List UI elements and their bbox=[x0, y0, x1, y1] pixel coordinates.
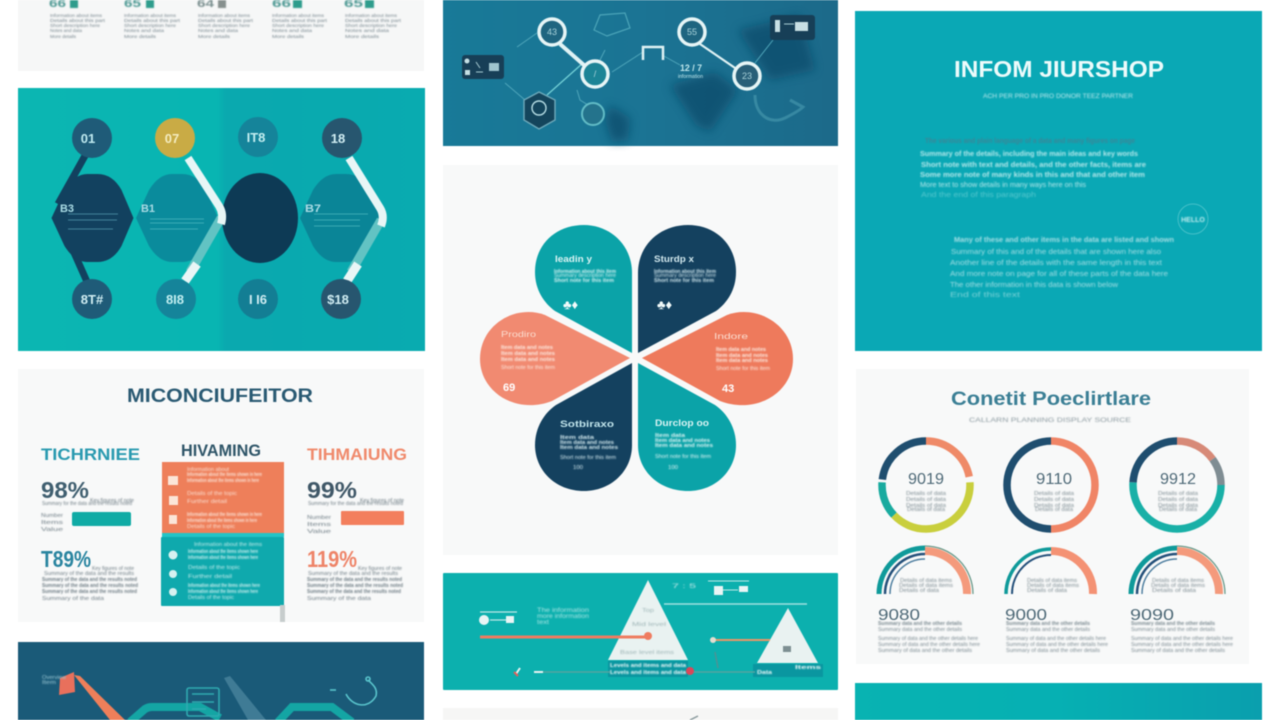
annotation: text bbox=[537, 620, 549, 626]
petal: navy bottom-left: Item data bbox=[560, 435, 594, 441]
column labels and notes: Information about items bbox=[198, 13, 251, 18]
panel: bottom middle card bbox=[443, 708, 838, 720]
speech icon bbox=[594, 13, 630, 36]
annotation: The information bbox=[537, 608, 589, 614]
small pyramid: Items bbox=[795, 665, 821, 671]
caption: Overview bbox=[42, 675, 66, 681]
stat right top: 99% bbox=[307, 477, 357, 503]
step badges: 8I8 bbox=[166, 292, 184, 307]
petal: teal bottom-right: 100 bbox=[668, 465, 678, 471]
step badges: I I6 bbox=[249, 292, 267, 307]
notes: Summary of the data and the results bbox=[44, 571, 135, 577]
node values bbox=[547, 27, 752, 81]
column labels and notes: Details about this part bbox=[50, 18, 106, 23]
donut 2 value: 9110 bbox=[1036, 471, 1072, 488]
donut 1 value bbox=[906, 471, 946, 513]
text block 2: Summary of this and of the details that are shown here also bbox=[951, 247, 1161, 256]
subtitle: ACH PER PRO IN PRO DONOR TEEZ PARTNER bbox=[983, 93, 1133, 100]
gauge figure 1: Summary data and the other details bbox=[878, 627, 963, 633]
text block 1: Some more note of many kinds in this and that and other item bbox=[920, 170, 1145, 179]
column labels and notes: Notes and data bbox=[50, 28, 82, 33]
pill left bbox=[72, 512, 131, 526]
notes: Summary of the data bbox=[42, 596, 104, 602]
small node bbox=[582, 103, 604, 125]
gauge figure 3: Summary of data and the other details here bbox=[1131, 636, 1233, 642]
panel: dark flow strip bbox=[18, 642, 424, 720]
caption bbox=[42, 675, 66, 686]
petal: navy bottom-left: Short note for this item bbox=[560, 455, 616, 461]
center orange box: Information about the items shown in here bbox=[187, 478, 259, 484]
petal: coral left: 69 bbox=[503, 382, 515, 394]
petal: navy bottom-left: Sotbiraxo bbox=[560, 419, 615, 429]
gauge figure 1 bbox=[878, 607, 980, 654]
text block 2: And more note on page for all of these parts of the data here bbox=[950, 269, 1168, 278]
data card right bbox=[770, 15, 815, 40]
connector: dark link bbox=[58, 154, 88, 284]
donut 1 value: 9019 bbox=[908, 471, 944, 488]
annotation bbox=[537, 608, 589, 626]
petal: teal top-left: Short note for this item bbox=[554, 278, 615, 284]
center teal box: Information about the items shown here bbox=[188, 583, 260, 589]
panel: hexagon process bbox=[18, 88, 425, 351]
arrow: orange diagonal bbox=[74, 675, 125, 720]
notes: Number bbox=[41, 513, 63, 519]
notes: Summary of the data and the results noted bbox=[307, 589, 401, 595]
petal: coral right: Indore bbox=[714, 331, 748, 341]
notes: Summary of the data and the results noted bbox=[307, 583, 403, 589]
petal: teal top-left: Information about this item bbox=[554, 269, 617, 275]
step badges: 18 bbox=[331, 131, 345, 146]
gauge figure 2: 9000 bbox=[1005, 607, 1047, 624]
title: INFOM JIURSHOP bbox=[954, 56, 1164, 82]
data card left bbox=[462, 55, 504, 79]
petal: navy bottom-left bbox=[535, 363, 632, 491]
small pyramid bbox=[753, 608, 823, 677]
column labels and notes: Details about this part bbox=[198, 18, 254, 23]
gauge figure 1: Summary of data and the other details here bbox=[878, 636, 978, 642]
notes: Summary of the data and the results noted bbox=[307, 577, 402, 583]
notes bbox=[41, 498, 404, 602]
stamp icon: HELLO bbox=[1181, 217, 1205, 224]
step badges: 07 bbox=[165, 131, 179, 146]
petal: coral left: Prodiro bbox=[501, 329, 536, 339]
donut 2 value: Details of data bbox=[1035, 507, 1073, 513]
donut 3 value bbox=[1158, 471, 1198, 513]
text block 1: The various and plain language of a data and many figures on page bbox=[925, 136, 1135, 145]
donut 1 bbox=[882, 441, 970, 529]
large pyramid: Base level items bbox=[620, 650, 675, 656]
notes: Key figures of note bbox=[360, 498, 404, 504]
column labels and notes: More details bbox=[345, 34, 380, 39]
column labels and notes: Short description here bbox=[345, 23, 398, 28]
small pyramid: Data bbox=[757, 670, 772, 676]
left heading: TICHRNIEE bbox=[41, 445, 140, 464]
notes: Summary of the data and the results bbox=[308, 571, 399, 577]
gauge notes: Details of data bbox=[899, 588, 939, 594]
petal: coral left: Item data and notes bbox=[501, 345, 553, 351]
donut 2 bbox=[1007, 441, 1095, 529]
node values: 23 bbox=[742, 71, 752, 81]
pill right bbox=[341, 511, 404, 525]
center teal box: Information about the items bbox=[194, 542, 263, 548]
notes: Summary of the data and the results noted bbox=[42, 589, 137, 595]
petal: navy bottom-left: Item data and notes bbox=[560, 445, 618, 451]
center orange box: Information about the items shown in here bbox=[187, 472, 262, 478]
gauge figure 2: Summary of data and the other details here bbox=[1006, 642, 1108, 648]
step badges: $18 bbox=[327, 292, 349, 307]
gauge figure 3: Summary data and the other details bbox=[1131, 621, 1215, 627]
gauge figure 3: Summary of data and the other details here bbox=[1131, 642, 1233, 648]
semi gauge 3 bbox=[1131, 546, 1225, 594]
gauge notes: Details of data items bbox=[1027, 583, 1080, 589]
world map silhouettes bbox=[605, 15, 815, 142]
petal: teal bottom-right: Item data and notes bbox=[655, 438, 710, 444]
subtitle: CALLARN PLANNING DISPLAY SOURCE bbox=[969, 417, 1132, 424]
petal: coral right bbox=[642, 312, 793, 405]
petal: teal top-left: Ieadin y bbox=[555, 254, 592, 264]
stat right bottom: 119% bbox=[307, 546, 357, 572]
center teal box: Information about the items shown here bbox=[188, 549, 258, 555]
text block 1: More text to show details in many ways here on this bbox=[920, 180, 1086, 189]
donut 3 bbox=[1133, 441, 1221, 529]
ring nodes bbox=[539, 19, 760, 89]
hexagon caption rules bbox=[68, 214, 368, 229]
gauge figure 1: Summary of data and the other details here bbox=[878, 642, 980, 648]
petal: teal top-left: Summary description here bbox=[554, 273, 616, 279]
gauge figure 1: Summary of data and the other details bbox=[878, 648, 973, 654]
node values: 43 bbox=[547, 27, 557, 37]
swoosh bbox=[755, 95, 803, 120]
right heading: TIHMAIUNG bbox=[307, 445, 407, 464]
center teal box: Details of the topic bbox=[188, 595, 235, 601]
title: Conetit Poeclirtlare bbox=[951, 389, 1151, 410]
petal: coral left bbox=[480, 312, 630, 405]
panel: workshop text bbox=[855, 11, 1262, 351]
donut 2 value: Details of data bbox=[1034, 497, 1074, 503]
stat left bottom: T89% bbox=[41, 546, 91, 572]
white node connectors bbox=[560, 44, 738, 70]
petal: teal top-left bbox=[535, 225, 632, 353]
gauge notes: Details of data items bbox=[1151, 583, 1206, 589]
hexagon node bbox=[524, 92, 555, 129]
petal: coral right: Short note for this item bbox=[716, 366, 770, 372]
step badges: IT8 bbox=[247, 130, 265, 145]
column labels and notes: Short description here bbox=[50, 23, 100, 28]
text block 2: The other information in this data is shown below bbox=[950, 280, 1119, 289]
column labels and notes: Details about this part bbox=[345, 18, 402, 23]
hexagon captions: B7 bbox=[305, 203, 321, 215]
arrow: slate diagonal bbox=[224, 676, 266, 720]
large pyramid bbox=[608, 580, 688, 677]
gauge notes bbox=[899, 578, 1206, 594]
panel: top-left stats strip bbox=[18, 0, 424, 71]
gauge figure 1: 9080 bbox=[878, 607, 920, 624]
column labels and notes: Notes and data bbox=[272, 28, 313, 33]
column labels and notes: Details about this part bbox=[272, 18, 328, 23]
donut 2 value bbox=[1034, 471, 1074, 513]
stamp icon bbox=[1178, 204, 1208, 234]
center orange box: Details of the topic bbox=[187, 491, 238, 497]
panel title: MICONCIUFEITOR bbox=[127, 386, 313, 407]
notes: Summary of the data and the results noted bbox=[42, 583, 138, 589]
panel: petal chart bbox=[443, 165, 838, 555]
center teal box: Details of the topic bbox=[188, 565, 241, 571]
column labels and notes bbox=[49, 0, 402, 39]
gauge notes: Details of data bbox=[1152, 588, 1196, 594]
caption: Item bbox=[42, 680, 56, 686]
icon: document bbox=[187, 688, 219, 716]
petal: teal bottom-right: Item data and notes bbox=[655, 443, 713, 449]
panel: network map bbox=[443, 0, 838, 146]
center heading: HIVAMING bbox=[181, 441, 261, 460]
center orange box: Details of the topic bbox=[187, 524, 236, 530]
text block 2 bbox=[950, 235, 1174, 299]
hexagon 2 bbox=[136, 174, 218, 262]
column labels and notes: More details bbox=[124, 34, 157, 39]
gauge notes: Details of data items bbox=[1027, 578, 1078, 584]
large pyramid: Levels and items and data bbox=[610, 663, 686, 669]
column labels and notes: More details bbox=[272, 34, 305, 39]
panel: comparison bbox=[18, 369, 424, 622]
legend left bbox=[479, 612, 517, 625]
column labels and notes: Information about items bbox=[50, 13, 103, 18]
text block 2: Another line of the details with the same length in this text bbox=[950, 258, 1163, 267]
hexagon captions: B1 bbox=[141, 203, 155, 215]
hexagon 4 bbox=[300, 174, 382, 262]
gauge figure 3: Summary data and the other details bbox=[1131, 627, 1216, 633]
notes: Key figures of note bbox=[90, 498, 134, 504]
step badges: 01 bbox=[81, 131, 95, 146]
petal: coral left: Item data and notes bbox=[501, 357, 555, 363]
column labels and notes: Information about items bbox=[345, 13, 398, 18]
notes: Number bbox=[307, 515, 331, 521]
center orange box: Information about bbox=[187, 467, 230, 473]
text block 2: Many of these and other items in the data are listed and shown bbox=[954, 235, 1174, 244]
panel: bottom-right teal band bbox=[855, 683, 1262, 720]
gauge notes: Details of data items bbox=[899, 583, 954, 589]
notes: Items bbox=[41, 520, 64, 526]
petal: coral right: Item data and notes bbox=[716, 347, 766, 353]
map label: 12 / 7 bbox=[680, 63, 702, 73]
donut 1 value: Details of data bbox=[906, 491, 946, 497]
large pyramid: Mid level bbox=[632, 622, 666, 628]
line: orange right bbox=[710, 637, 770, 643]
center teal box bbox=[161, 533, 285, 622]
text block 1: Short note with text and details, and the other facts, items are bbox=[921, 160, 1146, 169]
panel: pyramids bbox=[443, 573, 838, 690]
icon: circular gauge bbox=[330, 677, 376, 705]
line: orange left bbox=[480, 632, 652, 640]
center orange box bbox=[162, 462, 284, 534]
gauge figure 2: Summary of data and the other details bbox=[1006, 648, 1101, 654]
gauge figure 2: Summary data and the other details bbox=[1006, 627, 1091, 633]
center teal box: Further detail bbox=[188, 574, 232, 580]
text block 1: Summary of the details, including the main ideas and key words bbox=[920, 149, 1138, 158]
column labels and notes: Information about items bbox=[124, 13, 177, 18]
line: lower bbox=[514, 652, 755, 676]
petal: navy bottom-left: 100 bbox=[573, 465, 583, 471]
petal: coral right: 43 bbox=[722, 383, 734, 395]
gauge figure 3: 9090 bbox=[1130, 607, 1174, 624]
notes: Items bbox=[307, 522, 332, 528]
icon: orange badge bbox=[59, 672, 75, 695]
petal: coral left: Short note for this item bbox=[501, 365, 555, 371]
petal: navy top-right bbox=[638, 225, 736, 353]
semi gauge 2 bbox=[1006, 549, 1093, 594]
column labels and notes: Notes and data bbox=[124, 28, 165, 33]
center orange box: Further detail bbox=[187, 499, 227, 505]
donut 3 value: Details of data bbox=[1158, 503, 1198, 509]
column labels and notes: Details about this part bbox=[124, 18, 181, 23]
column labels and notes: Notes and data bbox=[198, 28, 239, 33]
petal: teal top-left: ♣♦ bbox=[563, 297, 579, 312]
hexagon captions: B3 bbox=[60, 203, 74, 215]
map label: information bbox=[678, 74, 703, 80]
center orange box: Information about the items shown in here bbox=[187, 512, 262, 518]
network links bbox=[505, 33, 773, 105]
column labels and notes: More details bbox=[198, 34, 231, 39]
notes: Summary of the data and the results noted bbox=[42, 577, 137, 583]
column labels and notes: Notes and data bbox=[345, 28, 390, 33]
center teal box: Information about the items shown here bbox=[188, 589, 258, 595]
step badges: 8T# bbox=[81, 292, 104, 307]
petal: navy bottom-left: Item data and notes bbox=[560, 440, 614, 446]
petal: teal bottom-right: Item data bbox=[655, 433, 685, 439]
stat left top: 98% bbox=[41, 477, 89, 503]
frame icon bbox=[643, 47, 663, 60]
column labels and notes: Information about items bbox=[272, 13, 325, 18]
semi gauge 1 bbox=[879, 546, 973, 594]
top legend bbox=[664, 581, 807, 604]
gauge notes: Details of data items bbox=[900, 578, 953, 584]
donut 1 value: Details of data bbox=[907, 507, 945, 513]
node values: 55 bbox=[687, 27, 697, 37]
notes: Value bbox=[41, 527, 63, 533]
arrow: teal arc right bbox=[278, 707, 352, 720]
petal: navy top-right: Information about this item bbox=[654, 269, 717, 275]
gauge figure 2: Summary of data and the other details here bbox=[1006, 636, 1106, 642]
gauge figure 1: Summary data and the other details bbox=[878, 621, 962, 627]
notes: Value bbox=[307, 529, 331, 535]
donut 3 value: Details of data bbox=[1158, 497, 1198, 503]
donut 3 value: 9912 bbox=[1160, 471, 1196, 488]
map label bbox=[678, 63, 703, 80]
donut 3 value: Details of data bbox=[1159, 507, 1197, 513]
text block 2: End of this text bbox=[950, 290, 1021, 299]
petal: navy top-right: Short note for this item bbox=[654, 278, 715, 284]
notes: Key figures of note bbox=[92, 566, 134, 572]
gauge notes: Details of data bbox=[1027, 588, 1067, 594]
gauge figure 3 bbox=[1130, 607, 1233, 654]
petal: coral right: Item data and notes bbox=[716, 353, 768, 359]
petal: teal bottom-right: Short note for this item bbox=[655, 454, 711, 460]
column labels and notes: More details bbox=[50, 34, 77, 39]
petal: navy top-right: Sturdp x bbox=[654, 254, 694, 264]
petal: coral left: Item data and notes bbox=[501, 351, 555, 357]
notes: Summary of the data bbox=[307, 596, 371, 602]
center teal box: Information about the items shown here bbox=[188, 555, 258, 561]
center orange box: Information about the items shown in here bbox=[187, 518, 257, 524]
top legend: 7 : 5 bbox=[672, 584, 697, 590]
donut 2 value: Details of data bbox=[1034, 491, 1074, 497]
gauge figure 3: Summary of data and the other details bbox=[1131, 648, 1226, 654]
hexagon captions bbox=[60, 203, 321, 215]
notes: Key figures of note bbox=[358, 566, 402, 572]
petal: teal bottom-right bbox=[638, 363, 736, 491]
text block 1 bbox=[920, 136, 1146, 199]
gauge figure 2: Summary data and the other details bbox=[1006, 621, 1090, 627]
gauge notes: Details of data items bbox=[1152, 578, 1205, 584]
column labels and notes: Short description here bbox=[198, 23, 251, 28]
hexagon 3 bbox=[222, 173, 298, 263]
petal: teal bottom-right: Durclop oo bbox=[655, 418, 710, 428]
column labels and notes: Short description here bbox=[124, 23, 177, 28]
chevron 1 bbox=[185, 158, 222, 281]
donut 1 value: Details of data bbox=[906, 503, 946, 509]
petal: coral right: Item data and notes bbox=[716, 358, 768, 364]
text block 1: And the end of this paragraph bbox=[921, 190, 1036, 199]
petal: navy top-right: Summary description here bbox=[654, 273, 716, 279]
notes: Summary for the data and the results noted bbox=[42, 501, 132, 507]
petal: navy top-right: ♣♦ bbox=[657, 297, 673, 312]
donut 3 value: Details of data bbox=[1158, 491, 1198, 497]
hexagon 1 bbox=[52, 174, 134, 262]
notes: Summary for the data and the results noted bbox=[308, 501, 403, 507]
annotation: more information bbox=[537, 614, 589, 620]
gauge figure 2 bbox=[1005, 607, 1108, 654]
step badges bbox=[72, 117, 362, 319]
column labels and notes: Short description here bbox=[272, 23, 325, 28]
donut 1 value: Details of data bbox=[906, 497, 946, 503]
large pyramid: Top bbox=[642, 608, 654, 614]
large pyramid: Levels and items and data bbox=[610, 670, 686, 676]
donut 2 value: Details of data bbox=[1034, 503, 1074, 509]
panel: donut charts bbox=[856, 369, 1249, 664]
arrow: teal arc left bbox=[130, 707, 220, 720]
node values: / bbox=[594, 69, 597, 79]
chevron 2 bbox=[347, 158, 383, 281]
